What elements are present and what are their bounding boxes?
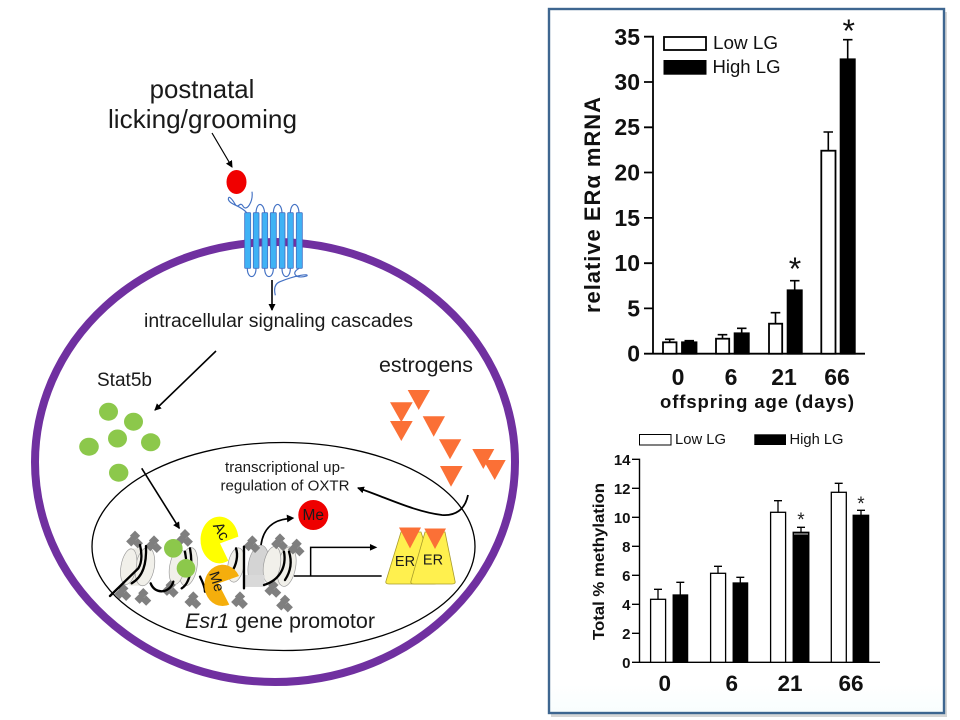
arrow: cascades to Stat5b <box>155 351 216 410</box>
icon: released Me: Me <box>303 507 324 524</box>
gene line and transcription start arrow <box>294 547 382 576</box>
label: Esr1 gene promotor: Esr1 gene promotor <box>185 609 375 633</box>
left diagram: cell signaling pathway <box>35 76 515 682</box>
bars <box>651 492 869 662</box>
legend <box>640 432 844 448</box>
estrogen receptor dimer: ER <box>423 552 443 568</box>
y tick labels: 0 <box>622 655 630 672</box>
y tick labels: 0 <box>627 340 640 366</box>
curved arrow: ER to OXTR <box>358 488 468 515</box>
x tick labels: 21 <box>777 671 803 696</box>
right panel: bar charts <box>549 9 947 717</box>
y tick labels: 25 <box>614 114 640 140</box>
legend: High LG <box>790 432 844 448</box>
y tick labels <box>614 24 640 366</box>
y tick labels: 14 <box>614 452 631 469</box>
x tick labels <box>672 364 850 390</box>
gene promoter nucleosomes and DNA <box>110 515 382 612</box>
arrow: receptor to cascades <box>271 280 273 310</box>
y tick labels: 10 <box>614 510 630 527</box>
significance asterisks: * <box>789 251 801 287</box>
x tick labels: 0 <box>672 364 684 390</box>
histone tails <box>126 531 143 548</box>
error bars <box>665 40 852 342</box>
icon: membrane receptor <box>228 192 307 295</box>
x tick labels <box>658 671 864 696</box>
icon: red ligand <box>226 170 246 194</box>
error bars <box>654 483 865 599</box>
chart: relative ER alpha mRNA <box>580 13 865 412</box>
x tick labels: 0 <box>658 671 671 696</box>
label: transcriptional up-regulation of OXTR: transcriptional up- <box>225 459 345 476</box>
x axis title: offspring age (days) <box>660 391 854 412</box>
axes <box>632 459 880 662</box>
icon: Me orange pacman: Me <box>205 570 227 594</box>
bars <box>663 59 855 354</box>
y tick labels: 4 <box>622 597 631 614</box>
icon: Me orange pacman <box>204 565 239 606</box>
nucleus outline <box>92 442 475 650</box>
axes <box>644 37 865 354</box>
y tick labels: 20 <box>614 160 640 186</box>
curved arrow: methyl release <box>261 519 288 545</box>
y axis title: relative ERα mRNA <box>580 97 605 313</box>
Stat5b bound dots <box>164 539 195 578</box>
icon: Ac yellow pacman: Ac <box>209 520 233 544</box>
heading: postnatal licking/grooming: licking/grooming <box>108 106 297 134</box>
y tick labels: 5 <box>627 296 640 322</box>
label: intracellular signaling cascades: intracellular signaling cascades <box>144 311 413 332</box>
y tick labels: 6 <box>622 568 630 585</box>
label: estrogens: estrogens <box>379 353 473 377</box>
y tick labels: 30 <box>614 69 640 95</box>
significance asterisks <box>797 494 865 531</box>
significance asterisks: * <box>842 13 855 49</box>
y tick labels <box>614 452 631 672</box>
legend: Low LG <box>675 432 726 448</box>
y tick labels: 35 <box>614 24 640 50</box>
arrow: Stat5b to promoter <box>142 468 179 528</box>
x tick labels: 6 <box>725 671 738 696</box>
label: Stat5b: Stat5b <box>97 370 152 391</box>
x tick labels: 66 <box>824 364 850 390</box>
y tick labels: 15 <box>614 205 640 231</box>
legend: Low LG <box>713 32 778 53</box>
estrogen receptor dimer <box>386 528 455 584</box>
heading: postnatal licking/grooming: postnatal <box>150 76 254 104</box>
label: transcriptional up-regulation of OXTR <box>220 459 350 494</box>
histone cylinders <box>118 544 299 588</box>
icon: released Me <box>298 500 328 530</box>
significance asterisks: * <box>857 494 865 515</box>
label: transcriptional up-regulation of OXTR: regulation of OXTR <box>220 478 350 494</box>
x tick labels: 21 <box>771 364 797 390</box>
DNA strand <box>110 545 291 596</box>
cell membrane ring <box>35 242 515 682</box>
legend: High LG <box>712 56 780 77</box>
Stat5b green dots <box>79 403 160 482</box>
y tick labels: 10 <box>614 250 640 276</box>
y tick labels: 8 <box>622 539 630 556</box>
x tick labels: 6 <box>725 364 737 390</box>
estrogen receptor dimer: ER <box>395 554 415 570</box>
significance asterisks: * <box>797 510 805 531</box>
chart: total percent methylation <box>591 432 880 696</box>
y tick labels: 12 <box>614 481 630 498</box>
heading: postnatal licking/grooming <box>108 76 297 134</box>
arrow: licking to ligand <box>212 133 232 167</box>
significance asterisks <box>789 13 855 287</box>
y axis title: Total % methylation <box>591 483 608 640</box>
estrogen orange triangles <box>390 390 506 487</box>
x tick labels: 66 <box>838 671 864 696</box>
legend <box>664 32 780 77</box>
icon: Ac yellow pacman <box>201 517 238 563</box>
y tick labels: 2 <box>622 626 630 643</box>
